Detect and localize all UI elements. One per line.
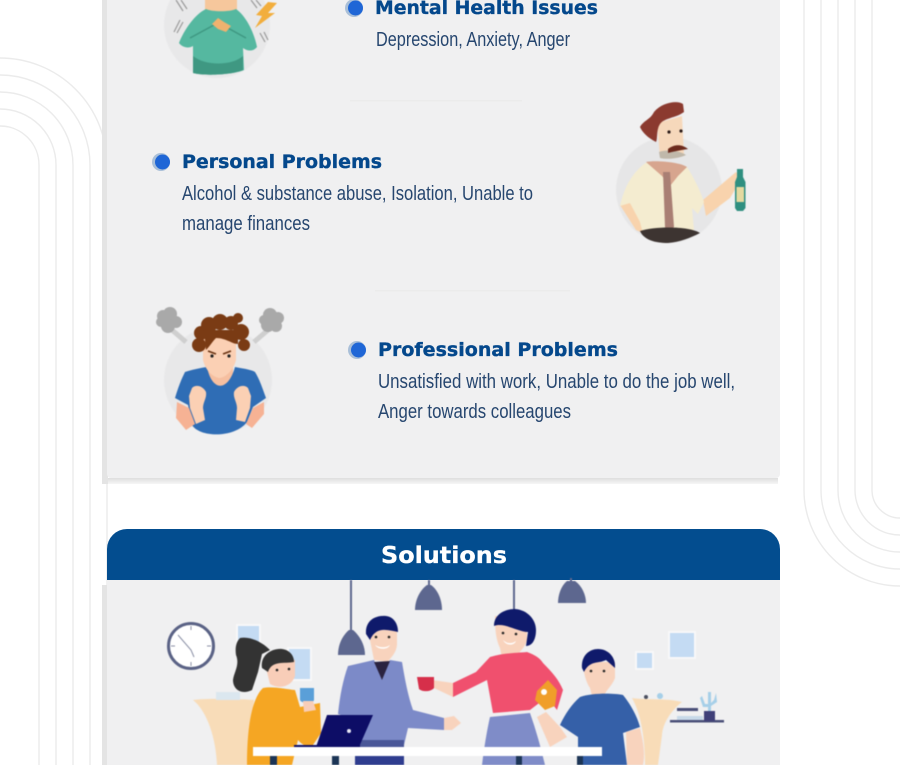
wall clock	[168, 624, 214, 668]
text: professional problems details: Unsatisfied with work, Unable to do the job well,	[378, 371, 735, 393]
illustration: stressed person in teal sweater	[164, 0, 277, 78]
woman in yellow	[233, 638, 321, 765]
laptop	[294, 715, 373, 748]
text: personal problems details	[182, 183, 533, 235]
heading: professional problems: Professional Problems	[378, 339, 618, 361]
illustration: man holding bottle	[616, 102, 746, 243]
man in blue shirt	[535, 649, 644, 765]
bullet: personal problems	[152, 153, 170, 171]
panel: solutions	[102, 529, 780, 765]
wall frames	[237, 625, 695, 680]
panel: problems	[102, 0, 780, 484]
bullet: mental health	[345, 0, 363, 17]
pendant lamps	[338, 578, 586, 655]
woman in pink	[417, 609, 563, 765]
table	[253, 747, 602, 765]
text: professional problems details: Anger towards colleagues	[378, 401, 571, 423]
shelf with books and cactus	[644, 692, 724, 722]
man in periwinkle sweater	[338, 616, 461, 765]
solutions header bar	[107, 529, 780, 580]
text: professional problems details	[378, 371, 735, 423]
bullet: professional problems	[348, 341, 366, 359]
text: personal problems details: Alcohol & substance abuse, Isolation, Unable to	[182, 183, 533, 205]
text: mental health symptoms: Depression, Anxiety, Anger	[376, 29, 570, 51]
right vase	[632, 698, 682, 765]
heading: personal problems: Personal Problems	[182, 151, 382, 173]
illustration: team having coffee	[168, 578, 724, 765]
text: personal problems details: manage finances	[182, 213, 310, 235]
illustration: angry person with smoke	[156, 307, 284, 434]
heading: solutions: Solutions	[381, 543, 507, 569]
left vase	[193, 699, 254, 765]
